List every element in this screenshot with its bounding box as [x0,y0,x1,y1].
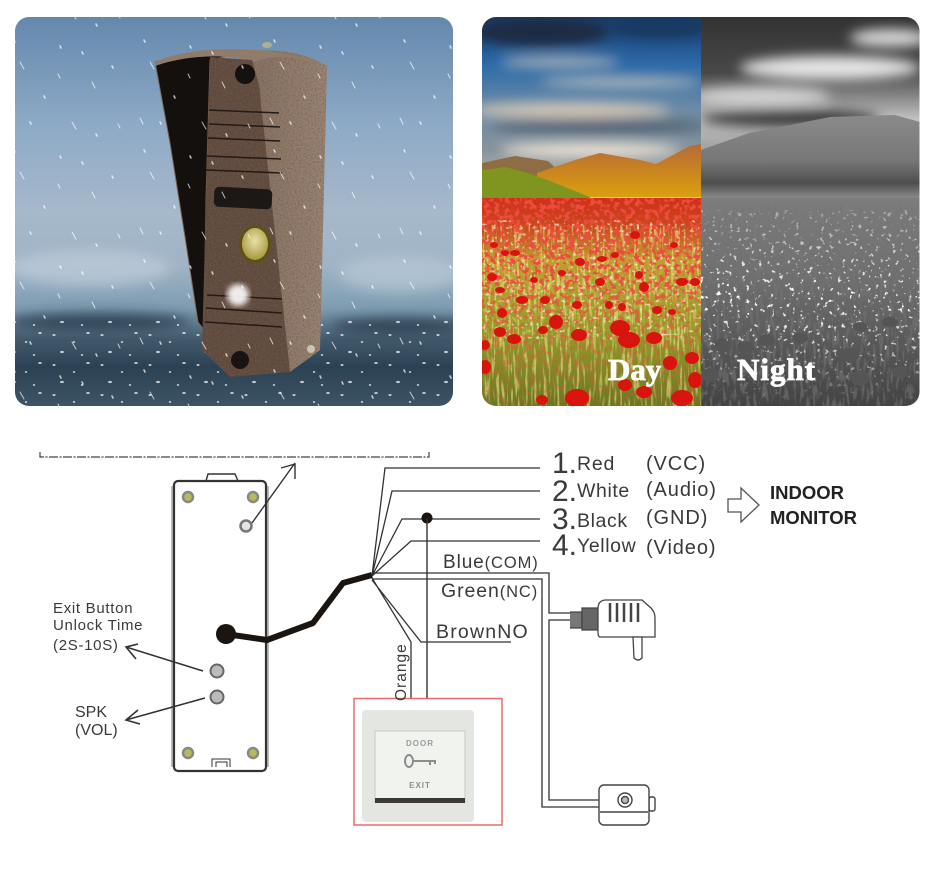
panel grooves [205,110,282,327]
night clouds [690,29,930,127]
background: blurred water bokeh [10,250,470,334]
day white flower specks [482,220,702,340]
push button [375,731,465,802]
exit button photo in red frame [354,698,502,825]
wire labels: monitor: 1. [552,447,577,480]
text: speaker volume: (VOL) [75,722,118,739]
text: exit button unlock time [53,600,143,654]
camera lens [235,64,255,84]
wire labels: monitor: Red [577,453,615,475]
cable end blob [216,624,236,644]
photo panel: weatherproof doorbell in rain [10,17,470,406]
day half [470,17,710,408]
arrow: to indoor monitor [728,488,759,522]
night field [701,198,921,408]
wire labels: monitor: 3. [552,503,577,536]
doorbell right side face [245,51,327,372]
side screw [307,345,315,353]
arrow: exit button [126,644,203,671]
text: speaker volume: SPK [75,704,107,721]
wire labels: monitor: (Audio) [646,479,717,501]
doorbell front panel [202,57,290,377]
text: EXIT: EXIT [409,781,431,790]
cable [226,575,372,640]
text: exit button unlock time: (2S-10S) [53,637,119,654]
wire labels: monitor: Black [577,510,628,532]
wire labels: monitor: White [577,480,630,502]
arrow: speaker [126,698,205,724]
arrow: upper right [252,463,295,523]
text: indoor monitor [770,482,857,528]
water splash droplets [15,320,453,406]
day mountains [482,156,554,176]
text: indoor monitor: MONITOR [770,507,857,528]
wiring diagram [40,447,857,825]
label: orange: Orange [393,643,410,701]
text: DOOR: DOOR [406,739,434,748]
adjustment screw: unlock time [210,664,224,678]
wire labels: monitor: 4. [552,529,577,562]
wire labels: monitor: (VCC) [646,453,706,475]
day green hill [482,167,590,199]
day large poppies [479,231,702,407]
text: exit button unlock time: Unlock Time [53,617,143,634]
wire labels: monitor: 2. [552,475,577,508]
red frame [354,698,502,825]
day field [482,198,702,408]
wire: orange and brown [372,578,511,698]
night mountain [701,115,920,198]
dashed dimension line [40,452,429,457]
IR window [214,186,272,210]
text: speaker volume [75,704,118,739]
wire labels: monitor: (Video) [646,537,716,559]
adjustment screw: top [240,520,252,532]
wire labels: monitor [552,447,717,562]
switch plate [362,710,474,822]
adjustment screw: speaker volume [210,690,224,704]
night white flower specks [701,210,921,400]
housing screws [183,492,258,758]
day clouds [470,18,710,157]
rain streaks [15,17,453,406]
day field red poppies texture [482,198,702,408]
junction dot and black wire [422,512,432,698]
label: Day: Day [608,352,662,387]
wire labels: monitor: (GND) [646,507,708,529]
label: Night: Night [737,352,816,387]
call button [239,225,271,263]
label: brown NO: BrownNO [436,621,529,643]
label: blue COM: Blue(COM) [443,552,539,573]
night half [690,17,930,408]
day field grass [482,225,702,408]
doorbell hood inside [154,56,227,329]
text: exit button unlock time: Exit Button [53,600,133,617]
photo panel: day versus night comparison [470,17,930,408]
doorbell unit [155,42,327,377]
speaker hole [231,351,249,369]
text: indoor monitor: INDOOR [770,482,844,503]
top screw [262,42,272,48]
doorbell top lip [155,49,327,66]
wires to indoor monitor [372,468,540,576]
wire: blue and green to power and lock [372,573,599,807]
night field dark grass [701,305,920,406]
button shadow slot [375,798,465,803]
night dark poppies [701,317,908,385]
water splash on panel [227,284,249,306]
device back housing [172,474,268,771]
icon: power adapter [570,600,655,660]
wire labels: monitor: Yellow [577,535,637,557]
icon: key [405,755,436,767]
label: green NC: Green(NC) [441,580,538,602]
call button highlight [242,228,268,260]
icon: electric lock [599,785,655,825]
